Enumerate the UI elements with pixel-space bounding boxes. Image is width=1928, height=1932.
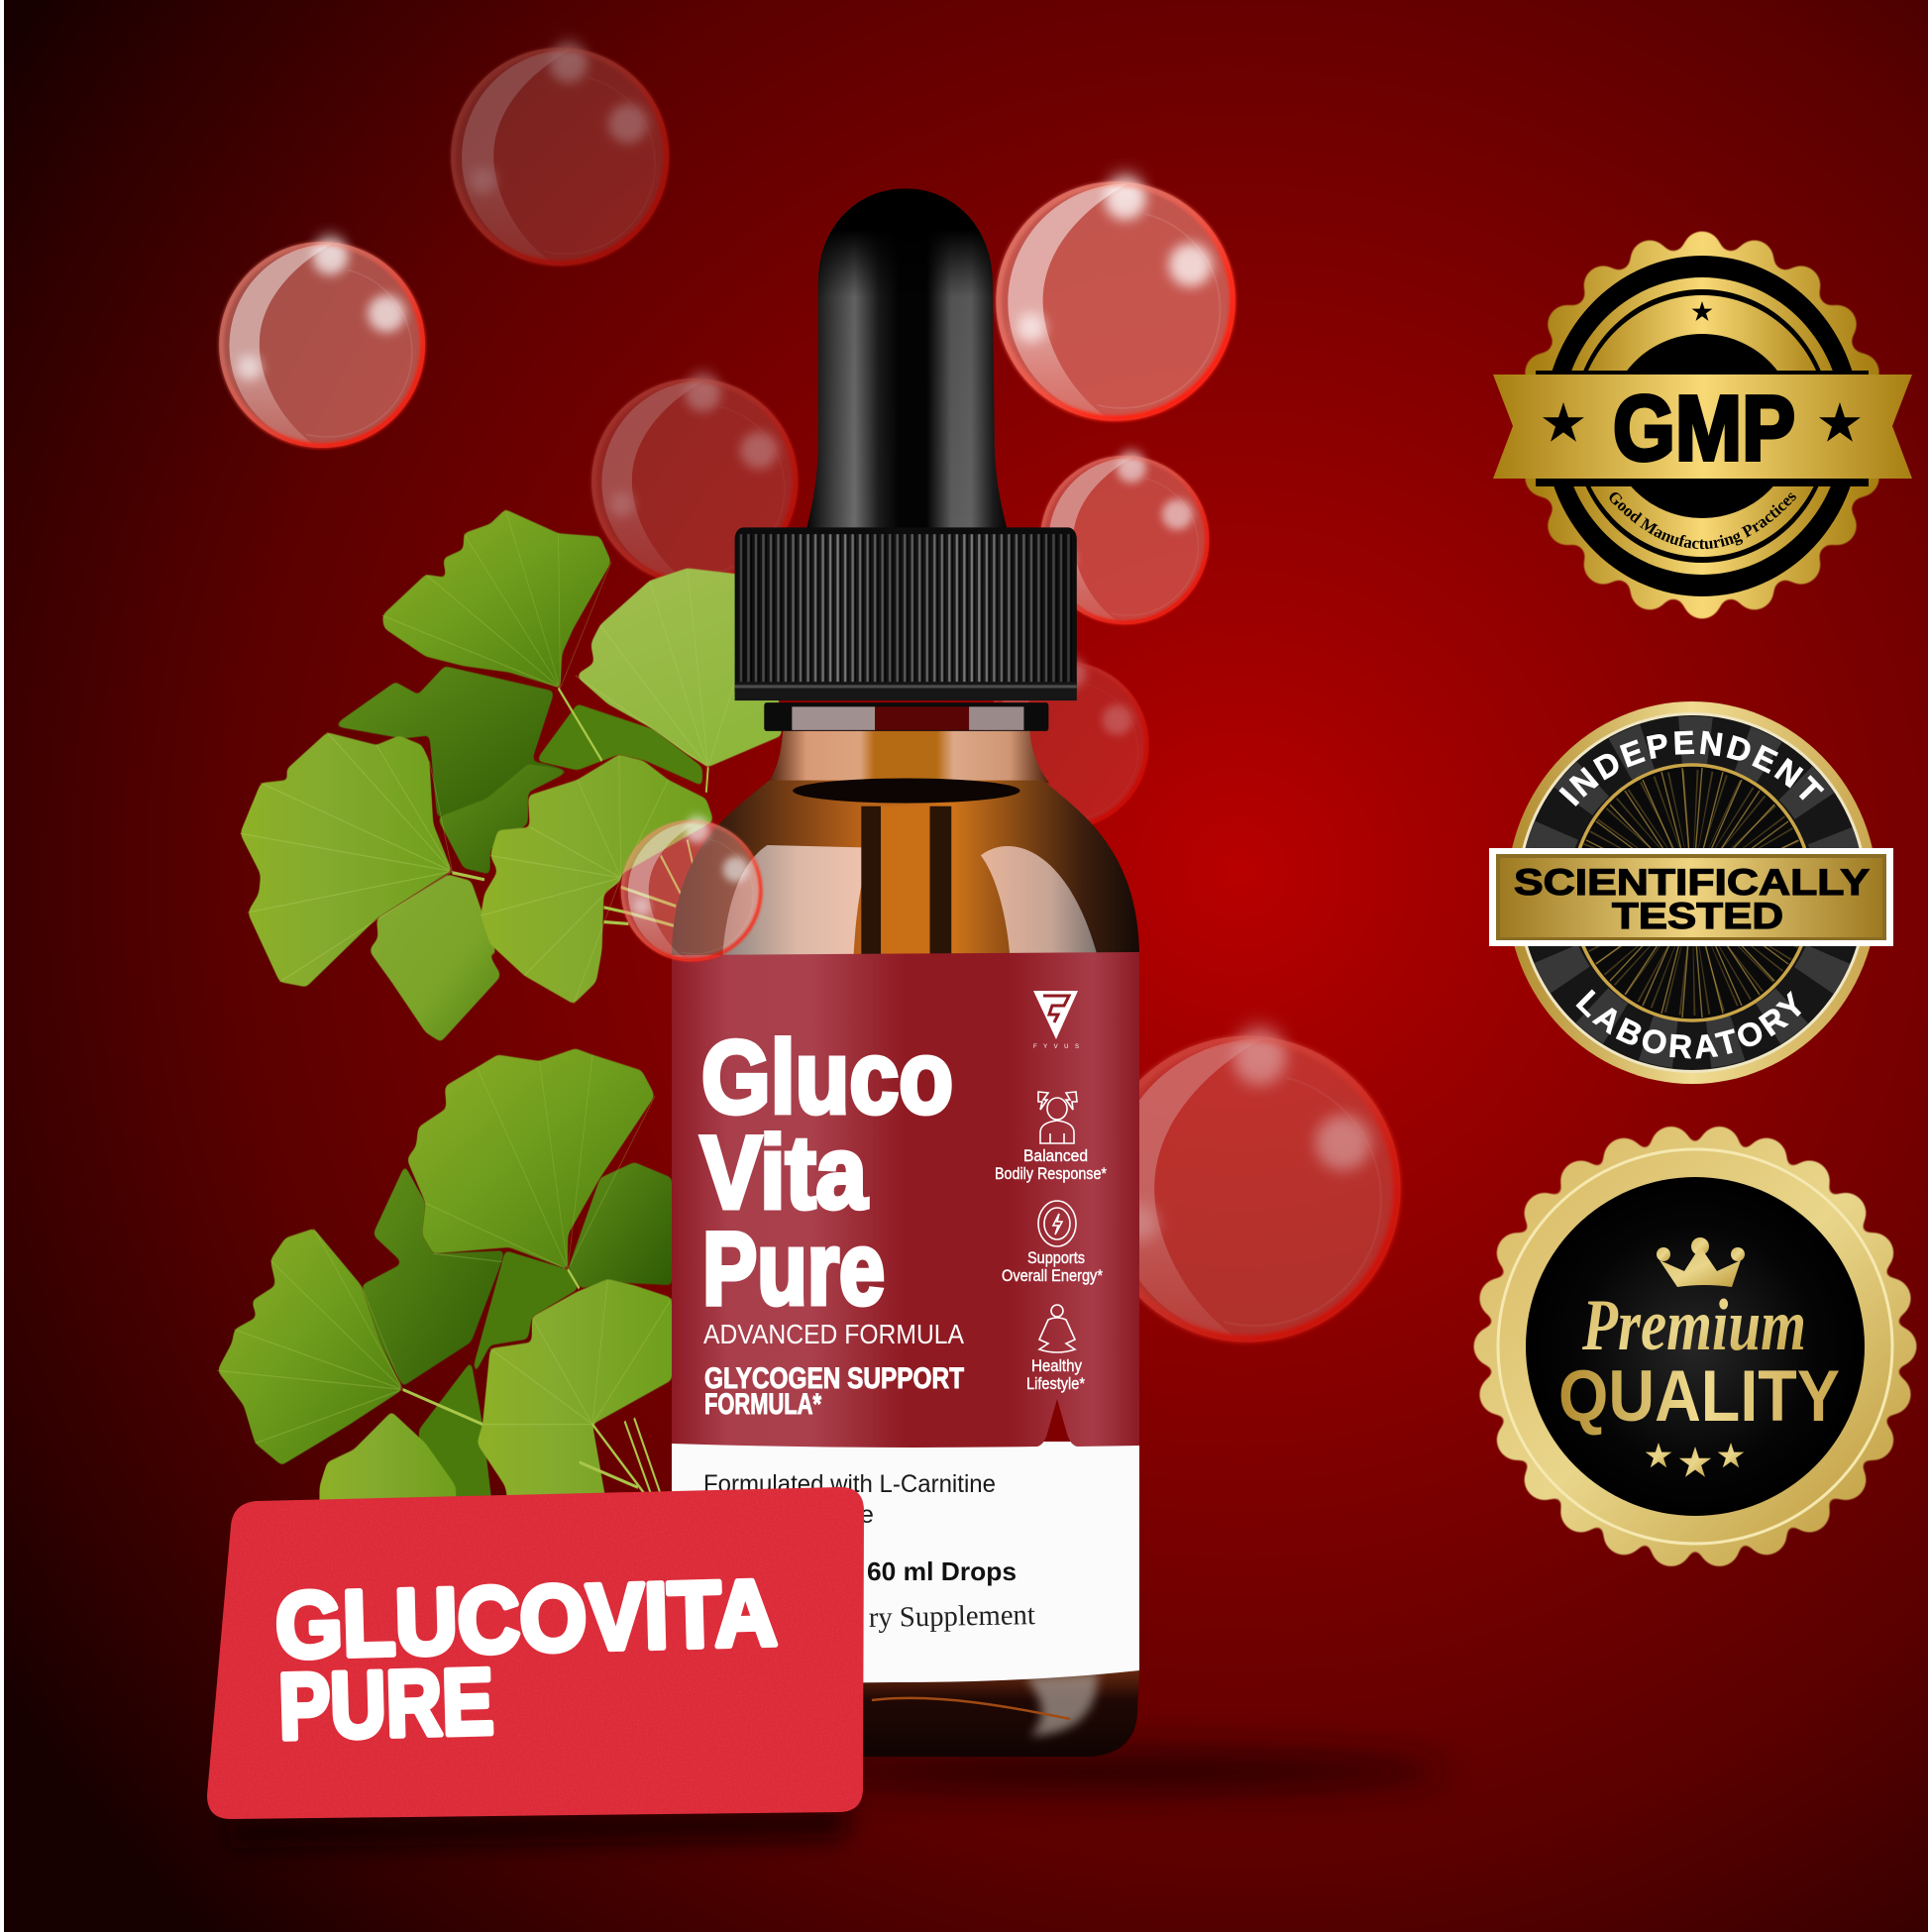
brand card <box>207 1487 864 1819</box>
amber glass shoulder <box>672 781 1139 959</box>
icon: crown <box>1657 1237 1745 1287</box>
icon: brand logo <box>1033 991 1079 1050</box>
icon: brand logo: FYVUS <box>1033 1044 1079 1050</box>
card shadow <box>223 1808 852 1848</box>
glass highlight left <box>722 845 873 959</box>
good manufacturing practices: Good Manufacturing Practices <box>1609 492 1796 549</box>
dropper bulb <box>806 188 1007 529</box>
label text: formulated: e <box>860 1501 874 1529</box>
leaf stems upper <box>452 689 708 926</box>
dropper tube <box>861 806 951 959</box>
inner sunburst <box>1572 765 1812 1020</box>
stars <box>1646 1443 1744 1477</box>
benefit: healthy lifestyle <box>1026 1305 1085 1393</box>
knurled cap <box>735 527 1077 700</box>
red label panel <box>672 952 1139 1448</box>
plate <box>1489 848 1893 946</box>
benefit: balanced bodily response: Bodily Response* <box>995 1164 1107 1183</box>
seal rings <box>1544 256 1861 596</box>
glycogen support formula: FORMULA* <box>704 1388 821 1421</box>
benefit: supports overall energy <box>1002 1201 1103 1285</box>
advanced formula: ADVANCED FORMULA <box>703 1319 964 1349</box>
leaf: dark middle <box>437 764 572 875</box>
label text: volume: 60 ml Drops <box>867 1556 1017 1586</box>
leaf stems lower <box>403 1269 663 1500</box>
outer gold ring <box>1507 701 1877 1084</box>
card text <box>274 1560 780 1759</box>
leaf: big left <box>240 732 452 987</box>
product name: Pure <box>702 1212 885 1327</box>
plate text <box>1514 862 1870 936</box>
gold band <box>1498 1149 1892 1544</box>
bubble: behind bottle shoulder <box>982 653 1148 828</box>
bubble: large lower right <box>1095 1020 1400 1342</box>
bubble: middle right <box>1040 447 1209 624</box>
leaf: lower right bright <box>477 1279 672 1532</box>
bubble: left bright <box>219 232 425 448</box>
independent arc text: INDEPENDENT <box>1558 731 1825 806</box>
label text: formulated <box>703 1470 996 1529</box>
product name: Vita <box>700 1116 868 1231</box>
leaf: back right <box>536 703 702 786</box>
leaf: top <box>382 509 611 689</box>
leaf: lower left big <box>217 1229 403 1465</box>
scalloped seal <box>1534 249 1871 601</box>
black centre <box>1526 1177 1865 1516</box>
benefit: supports overall energy: Overall Energy* <box>1002 1266 1103 1285</box>
amber liquid line <box>872 1698 1070 1719</box>
ginkgo leaves <box>217 509 782 1532</box>
badge: GMP <box>1493 231 1912 619</box>
benefit: balanced bodily response <box>995 1092 1107 1183</box>
bubble: upper dim <box>451 37 669 266</box>
benefit: healthy lifestyle: Lifestyle* <box>1026 1374 1085 1393</box>
floating bubbles behind bottle <box>219 37 1400 1342</box>
laboratory arc text: LABORATORY <box>1575 989 1801 1059</box>
scalloped seal <box>1492 1143 1898 1550</box>
benefit: healthy lifestyle: Healthy <box>1031 1356 1082 1375</box>
glycogen support formula <box>704 1362 964 1421</box>
amber glass neck <box>767 731 1049 783</box>
label text: supplement: ry Supplement <box>869 1599 1035 1634</box>
badge: scientifically tested <box>1489 701 1893 1084</box>
product name: Gluco <box>701 1020 953 1135</box>
bottle top: bulb, cap, glass <box>672 188 1139 959</box>
bubble: over bottle <box>621 813 762 961</box>
leaf: lower middle dark <box>473 1250 580 1393</box>
leaf: lower of left pair <box>369 875 501 1042</box>
leaf: dark back upper <box>333 666 572 817</box>
card text: GLUCOVITA <box>274 1560 778 1677</box>
leaf: lower back right <box>568 1162 672 1288</box>
benefit: supports overall energy: Supports <box>1027 1248 1085 1267</box>
ribbon <box>1493 375 1912 479</box>
premium script: Premium <box>1581 1285 1806 1366</box>
white lower label <box>672 1442 1139 1684</box>
quality: QUALITY <box>1558 1356 1840 1437</box>
product name <box>700 1020 953 1327</box>
benefit: balanced bodily response: Balanced <box>1023 1146 1088 1165</box>
label text: formulated: Formulated with L-Carnitine <box>703 1470 996 1498</box>
plate text: TESTED <box>1612 896 1783 936</box>
badge: premium quality <box>1492 1143 1898 1550</box>
ribbon stars <box>1543 402 1861 442</box>
GMP title: GMP <box>1613 376 1795 480</box>
bubble: top right bright <box>996 169 1235 421</box>
glass base <box>672 1669 1139 1757</box>
bubble: behind leaf and cap <box>591 369 798 585</box>
leaf: bottom left <box>319 1412 456 1532</box>
base reflection <box>1025 1672 1098 1736</box>
leaf: right centre <box>481 754 713 1004</box>
glass highlight right <box>981 846 1099 959</box>
top star <box>1692 301 1712 321</box>
neck collar <box>764 702 1048 731</box>
leaf: lower back small <box>418 1361 494 1519</box>
floor shadow <box>793 1750 1446 1793</box>
dropper bottle <box>672 188 1139 1757</box>
leaf: lower top big <box>406 1048 655 1269</box>
striped ring <box>1544 740 1841 1045</box>
glycogen support formula: GLYCOGEN SUPPORT <box>704 1362 964 1395</box>
leaf: top right <box>576 568 782 767</box>
plate text: SCIENTIFICALLY <box>1514 862 1870 903</box>
card text: PURE <box>277 1649 495 1759</box>
leaf: lower behind <box>362 1165 505 1386</box>
ribbon shadow <box>1536 371 1869 486</box>
